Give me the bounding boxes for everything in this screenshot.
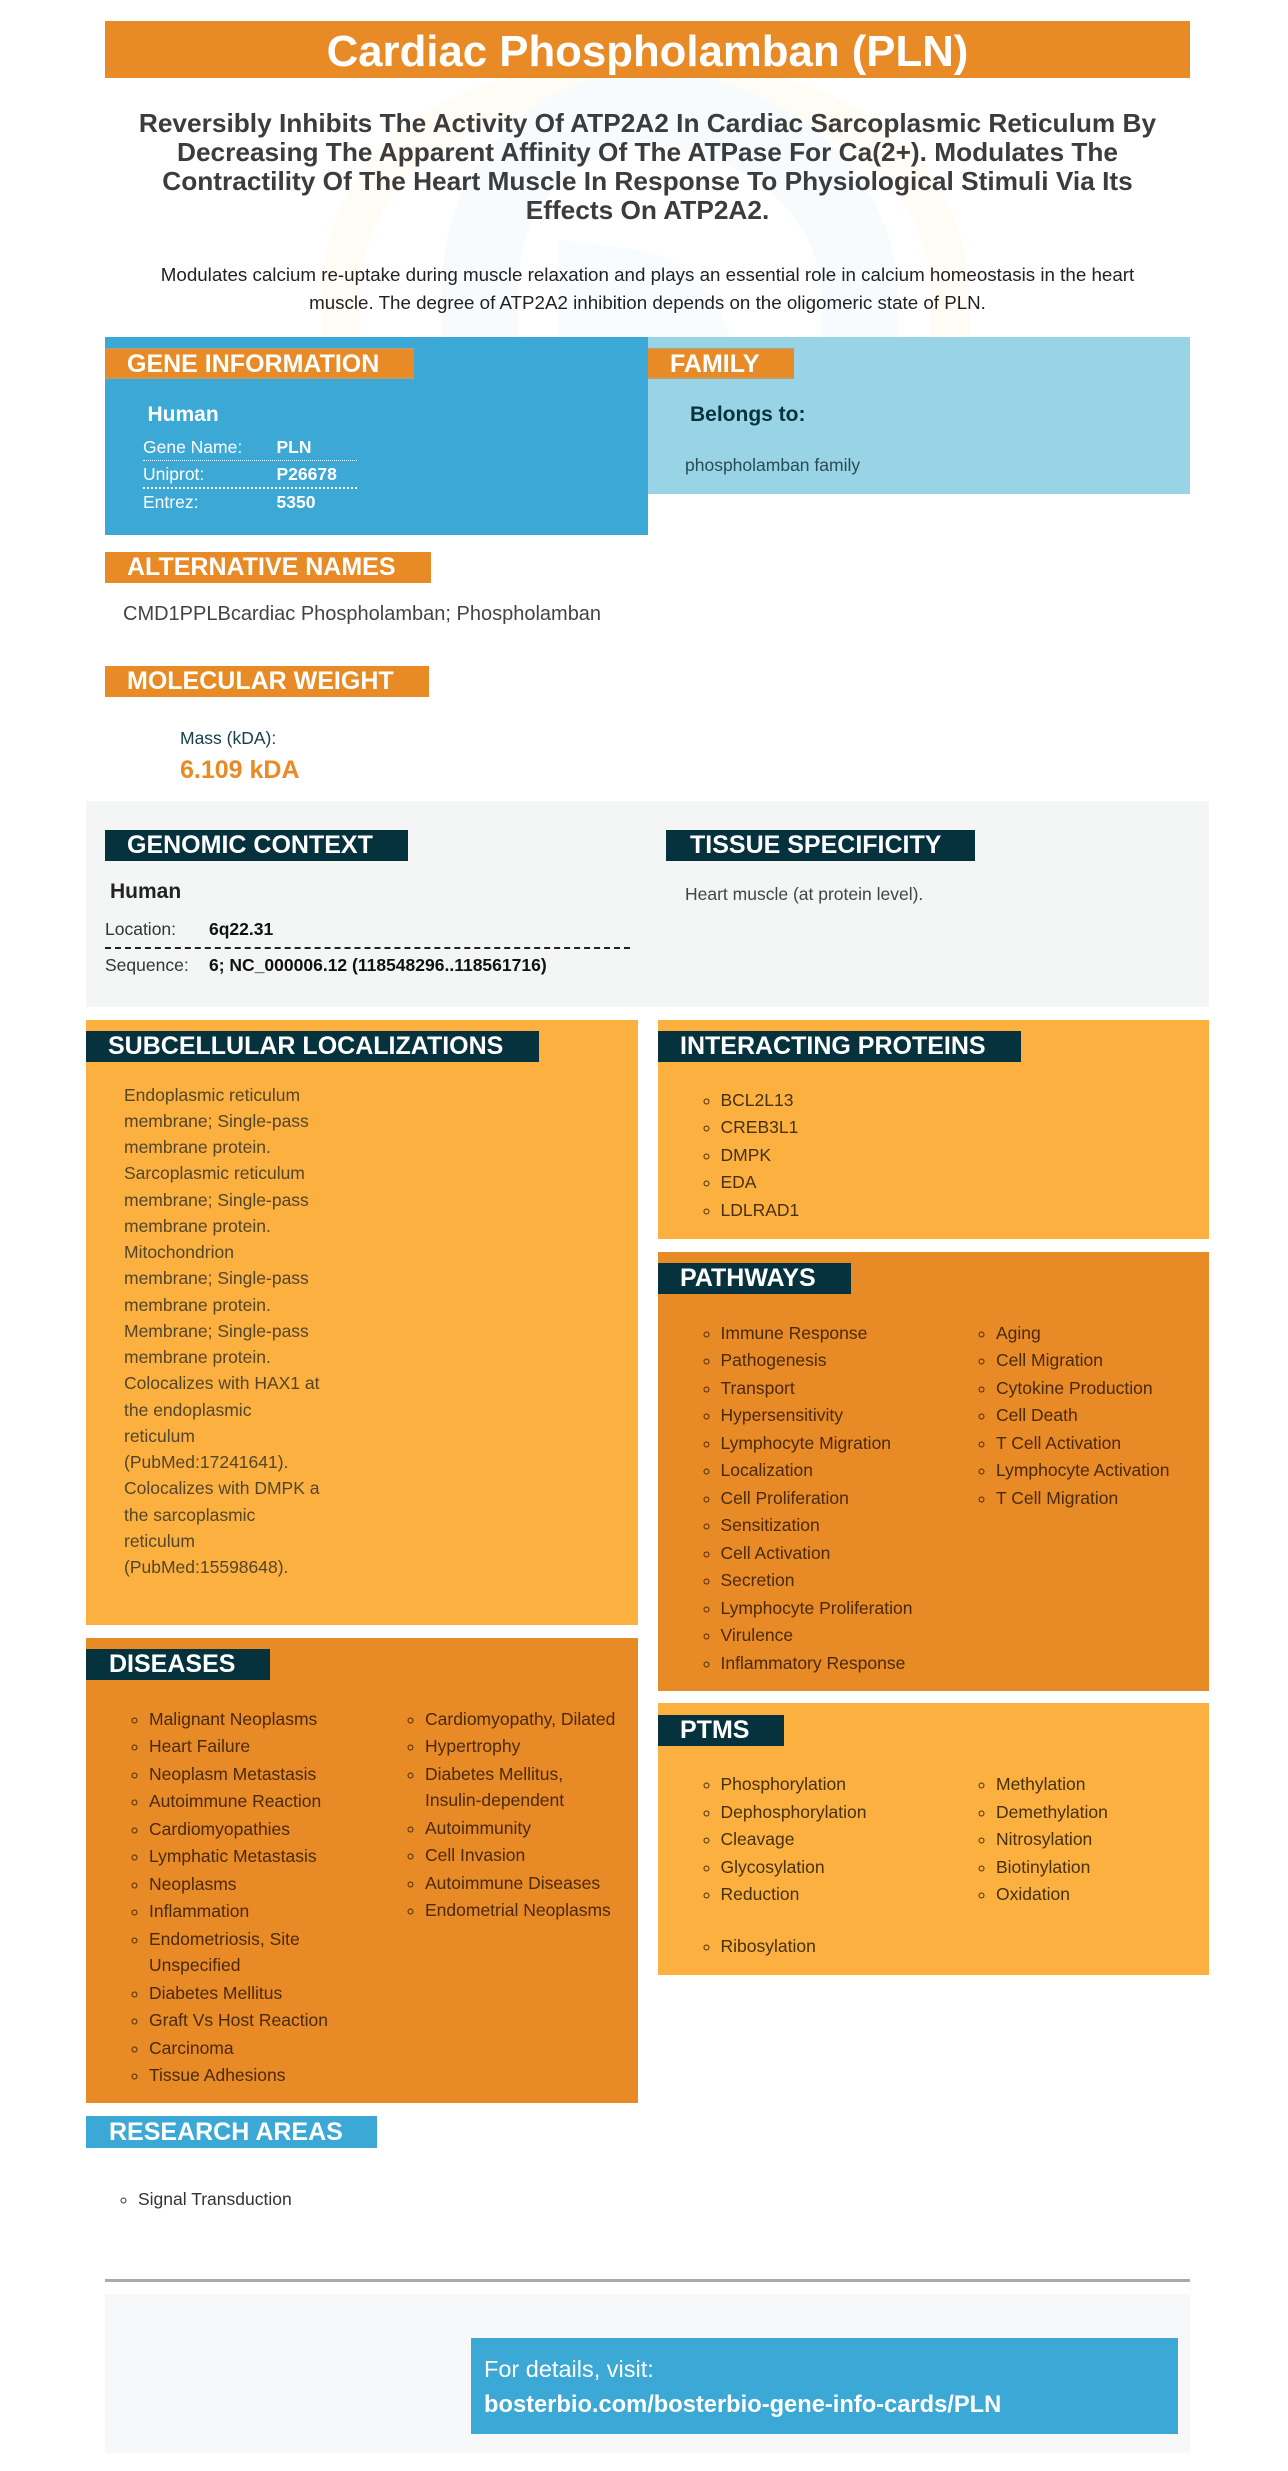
diseases list column 2: Diabetes Mellitus, [425, 1764, 563, 1784]
species label: Human [110, 880, 181, 903]
research areas list: Signal Transduction [138, 2189, 292, 2209]
callout label: For details, visit: [484, 2356, 654, 2382]
heading: ptms: PTMS [680, 1716, 749, 1744]
panel: subcellular localizations [86, 1020, 638, 1625]
pathways list column 2: Aging [996, 1323, 1041, 1343]
ptms list column 1 [704, 1774, 866, 1956]
heading: pathways [658, 1263, 851, 1294]
pathways list column 1: Lymphocyte Proliferation [720, 1598, 912, 1618]
diseases list column 2: Insulin-dependent [425, 1790, 564, 1810]
localization text: membrane; Single-pass [124, 1111, 309, 1131]
alternative names text: CMD1PPLBcardiac Phospholamban; Phospholamban [123, 603, 601, 625]
ptms list column 1: Reduction [720, 1884, 799, 1904]
diseases list column 2: Autoimmune Diseases [425, 1872, 600, 1892]
localization text: membrane protein. [124, 1295, 271, 1315]
panel: genomic context and tissue specificity [86, 801, 1209, 1007]
panel: pathways [658, 1252, 1209, 1691]
diseases list column 1: Neoplasms [149, 1874, 237, 1894]
mass label: Mass (kDA): [180, 728, 276, 748]
diseases list column 2: Cardiomyopathy, Dilated [425, 1709, 615, 1729]
pathways list column 2: Lymphocyte Activation [996, 1460, 1169, 1480]
panel: genomic context and tissue specificity: 6; NC_000006.12 (118548296..118561716) [209, 955, 547, 975]
location row: Location: [105, 919, 176, 939]
heading: subcellular localizations: SUBCELLULAR LOCALIZATIONS [108, 1032, 503, 1060]
protein list: CREB3L1 [720, 1117, 798, 1137]
protein list: EDA [720, 1172, 756, 1192]
ptms list column 2: Methylation [996, 1774, 1086, 1794]
pathways list column 1: Immune Response [720, 1323, 867, 1343]
diseases list column 1: Heart Failure [149, 1736, 250, 1756]
ptms list column 2: Demethylation [996, 1802, 1108, 1822]
protein list: LDLRAD1 [720, 1200, 799, 1220]
gene name row [143, 434, 357, 461]
title bar [105, 21, 1190, 78]
localization text: membrane; Single-pass [124, 1268, 309, 1288]
pathways list column 1: Hypersensitivity [720, 1405, 843, 1425]
ptms list column 1: Ribosylation [720, 1936, 816, 1956]
species label: Human [148, 403, 219, 426]
diseases list column 2 [408, 1709, 615, 1920]
panel: interacting proteins [658, 1020, 1209, 1239]
entrez row: Entrez: [143, 492, 198, 512]
pathways list column 1: Localization [720, 1460, 813, 1480]
diseases list column 1: Malignant Neoplasms [149, 1709, 317, 1729]
localization text: Sarcoplasmic reticulum [124, 1163, 305, 1183]
dashed divider [105, 947, 630, 949]
pathways list column 1: Lymphocyte Migration [720, 1433, 891, 1453]
diseases list column 1: Graft Vs Host Reaction [149, 2010, 328, 2030]
pathways list column 2 [978, 1323, 1169, 1508]
heading: family: FAMILY [670, 350, 759, 378]
localization text: Colocalizes with DMPK a [124, 1478, 319, 1498]
localization text [124, 1085, 320, 1577]
ptms list column 1: Dephosphorylation [720, 1802, 866, 1822]
localization text: membrane; Single-pass [124, 1190, 309, 1210]
heading: alternative names: ALTERNATIVE NAMES [127, 553, 396, 581]
localization text: Colocalizes with HAX1 at [124, 1373, 320, 1393]
gene name row: Gene Name: [143, 437, 242, 457]
pathways list column 2: Cell Migration [996, 1350, 1103, 1370]
diseases list column 1: Endometriosis, Site [149, 1929, 300, 1949]
pathways list column 1 [704, 1323, 912, 1673]
diseases list column 1: Carcinoma [149, 2038, 234, 2058]
heading: molecular weight: MOLECULAR WEIGHT [127, 667, 394, 695]
uniprot row: P26678 [276, 464, 337, 484]
entrez row [143, 492, 315, 512]
description: Modulates calcium re-uptake during muscle relaxation and plays an essential role in calcium homeostasis in the heart [161, 264, 1134, 285]
diseases list column 1: Inflammation [149, 1901, 249, 1921]
ptms list column 1: Cleavage [720, 1829, 794, 1849]
localization text: Mitochondrion [124, 1242, 234, 1262]
uniprot row: Uniprot: [143, 464, 204, 484]
diseases list column 2: Hypertrophy [425, 1736, 520, 1756]
ptms list column 1: Phosphorylation [720, 1774, 846, 1794]
protein list: DMPK [720, 1145, 771, 1165]
localization text: the sarcoplasmic [124, 1505, 255, 1525]
localization text: reticulum [124, 1426, 195, 1446]
diseases list column 2: Cell Invasion [425, 1845, 525, 1865]
diseases list column 1: Autoimmune Reaction [149, 1791, 321, 1811]
heading: family [648, 348, 794, 379]
subtitle: Decreasing The Apparent Affinity Of The ATPase For Ca(2+). Modulates The [177, 136, 1118, 166]
title bar: Cardiac Phospholamban (PLN) [327, 27, 968, 76]
heading: diseases: DISEASES [109, 1650, 235, 1678]
diseases list column 2: Endometrial Neoplasms [425, 1900, 611, 1920]
gene name row: PLN [276, 437, 312, 457]
family name: phospholamban family [685, 455, 860, 475]
pathways list column 1: Virulence [720, 1625, 793, 1645]
pathways list column 1: Secretion [720, 1570, 794, 1590]
heading: ptms [658, 1715, 784, 1746]
ptms list column 1: Glycosylation [720, 1856, 825, 1876]
diseases list column 1: Tissue Adhesions [149, 2065, 286, 2085]
ptms list column 2 [978, 1774, 1108, 1904]
mass value: 6.109 kDA [180, 756, 300, 784]
pathways list column 1: Pathogenesis [720, 1350, 827, 1370]
location row [105, 919, 273, 939]
ptms list column 2: Oxidation [996, 1884, 1070, 1904]
tissue text: Heart muscle (at protein level). [685, 884, 923, 904]
pathways list column 1: Cell Activation [720, 1543, 830, 1563]
diseases list column 1: Cardiomyopathies [149, 1819, 290, 1839]
sequence row [105, 955, 547, 975]
diseases list column 1: Unspecified [149, 1955, 240, 1975]
localization text: Endoplasmic reticulum [124, 1085, 300, 1105]
panel: gene information [105, 337, 648, 535]
footer divider [105, 2279, 1190, 2282]
description: muscle. The degree of ATP2A2 inhibition depends on the oligomeric state of PLN. [309, 292, 986, 313]
background watermark logo [322, 78, 969, 337]
callout: details link [471, 2338, 1178, 2434]
localization text: membrane protein. [124, 1216, 271, 1236]
pathways list column 2: T Cell Migration [996, 1488, 1118, 1508]
pathways list column 1: Sensitization [720, 1515, 820, 1535]
heading: research areas: RESEARCH AREAS [109, 2118, 343, 2146]
pathways list column 1: Transport [720, 1378, 795, 1398]
panel: ptms [658, 1703, 1209, 1975]
localization text: membrane protein. [124, 1347, 271, 1367]
localization text: (PubMed:17241641). [124, 1452, 288, 1472]
belongs to label: Belongs to: [690, 403, 806, 426]
localization text: Membrane; Single-pass [124, 1321, 309, 1341]
pathways list column 2: Cell Death [996, 1405, 1078, 1425]
subtitle: Reversibly Inhibits The Activity Of ATP2A2 In Cardiac Sarcoplasmic Reticulum By [139, 108, 1156, 138]
panel: diseases [86, 1638, 638, 2103]
heading: diseases [86, 1649, 270, 1680]
entrez row: 5350 [276, 492, 315, 512]
ptms list column 2: Nitrosylation [996, 1829, 1092, 1849]
localization text: (PubMed:15598648). [124, 1557, 288, 1577]
diseases list column 1: Lymphatic Metastasis [149, 1846, 317, 1866]
panel: family [648, 337, 1190, 494]
ptms list column 2: Biotinylation [996, 1856, 1090, 1876]
localization text: the endoplasmic [124, 1400, 251, 1420]
diseases list column 1: Neoplasm Metastasis [149, 1764, 316, 1784]
diseases list column 1: Diabetes Mellitus [149, 1982, 282, 2002]
heading: interacting proteins: INTERACTING PROTEINS [680, 1032, 986, 1060]
heading: gene information: GENE INFORMATION [127, 350, 379, 378]
heading: genomic context: GENOMIC CONTEXT [127, 831, 373, 859]
localization text: reticulum [124, 1531, 195, 1551]
diseases list column 1 [132, 1709, 328, 2085]
pathways list column 1: Cell Proliferation [720, 1488, 849, 1508]
subtitle [139, 108, 1156, 224]
subtitle: Contractility Of The Heart Muscle In Response To Physiological Stimuli Via Its [162, 166, 1133, 196]
heading: pathways: PATHWAYS [680, 1264, 816, 1292]
diseases list column 2: Autoimmunity [425, 1818, 531, 1838]
description [161, 264, 1134, 313]
callout url: bosterbio.com/bosterbio-gene-info-cards/PLN [484, 2392, 1001, 2418]
pathways list column 2: T Cell Activation [996, 1433, 1121, 1453]
heading: tissue specificity: TISSUE SPECIFICITY [690, 831, 941, 859]
uniprot row [143, 461, 357, 489]
localization text: membrane protein. [124, 1137, 271, 1157]
sequence row: Sequence: [105, 955, 189, 975]
subtitle: Effects On ATP2A2. [526, 194, 769, 224]
pathways list column 2: Cytokine Production [996, 1378, 1153, 1398]
panel: footer [105, 2294, 1190, 2453]
pathways list column 1: Inflammatory Response [720, 1653, 905, 1673]
protein list [704, 1090, 799, 1220]
protein list: BCL2L13 [720, 1090, 793, 1110]
panel: genomic context and tissue specificity: 6q22.31 [209, 919, 273, 939]
